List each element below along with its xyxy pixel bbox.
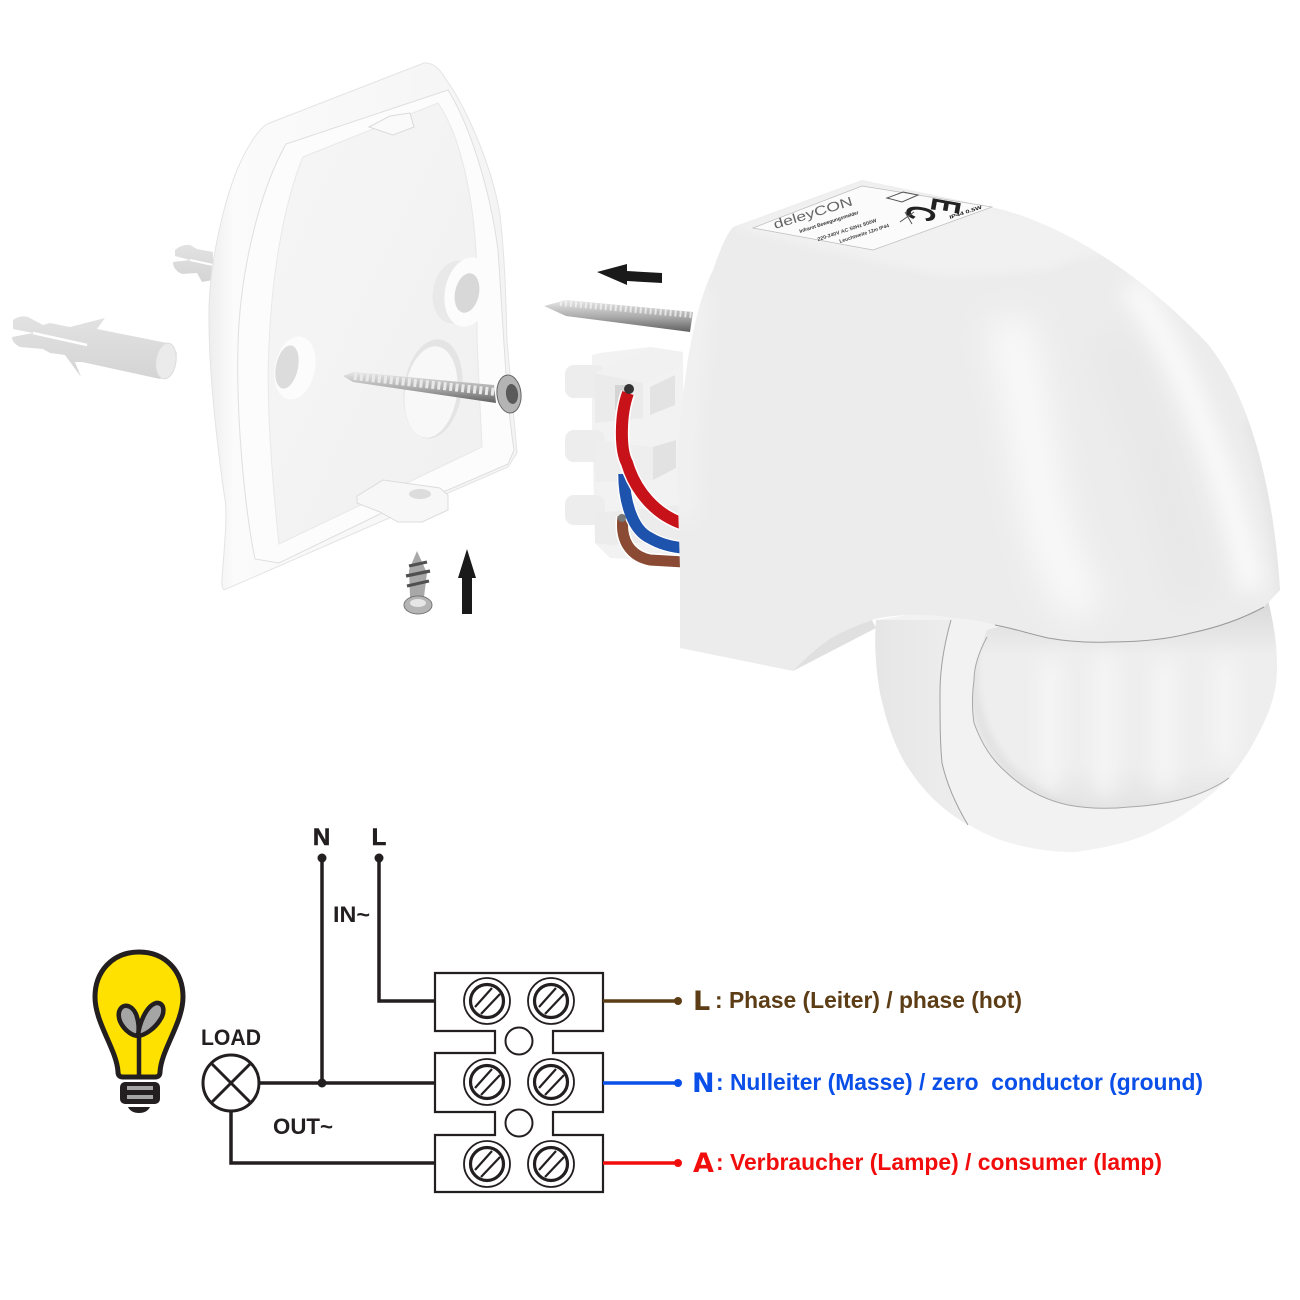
- legend: neutral: N: [692, 1068, 715, 1099]
- legend: neutral: [603, 1068, 1203, 1099]
- N label: N: [313, 824, 330, 851]
- wiring diagram: [95, 824, 1203, 1192]
- screw N right: [528, 1059, 574, 1105]
- L terminal dot: [374, 854, 384, 862]
- legend: phase: : Phase (Leiter) / phase (hot): [715, 987, 1022, 1013]
- terminal housing: [592, 347, 685, 562]
- legend: neutral: : Nulleiter (Masse) / zero conductor (ground): [716, 1069, 1203, 1095]
- blue wire: [624, 474, 684, 548]
- connector hole top: [506, 1028, 532, 1054]
- motion sensor dome: [875, 600, 1290, 852]
- LOAD label: LOAD: [201, 1025, 261, 1050]
- lower module front: [595, 505, 680, 545]
- IN label: IN~: [333, 902, 370, 927]
- cutout shadow: [793, 620, 876, 671]
- dome shell: [875, 600, 1277, 852]
- red wire end: [624, 384, 634, 394]
- lower edge line: [995, 607, 1264, 642]
- arrow: left: [597, 264, 662, 285]
- long mounting screw in plate: [343, 372, 523, 414]
- body shell: [678, 180, 1280, 671]
- plate floor: [268, 103, 482, 544]
- spec text line 2: 220-240V AC 50Hz 800W: [817, 218, 878, 243]
- upper module top: [595, 347, 683, 383]
- brown wire: [622, 517, 684, 562]
- legend: load: A: [693, 1148, 714, 1179]
- lens outline: [972, 637, 1229, 808]
- legend: load: : Verbraucher (Lampe) / consumer (lamp): [716, 1149, 1162, 1175]
- CE mark: E: E: [922, 195, 969, 216]
- connector hole bottom: [506, 1110, 532, 1136]
- legend: phase: [603, 986, 1022, 1017]
- rear wall plug behind plate: [173, 245, 213, 282]
- crossed bin mark: [900, 212, 914, 224]
- plate recess: [238, 90, 514, 563]
- screw L left: [464, 978, 510, 1024]
- sensor screw protruding: [544, 300, 693, 332]
- terminal strip: [435, 973, 603, 1192]
- upper screw post: [427, 253, 498, 331]
- terminal block on sensor: [565, 347, 685, 562]
- lamp symbol: [203, 1055, 259, 1111]
- cable knock-out: [397, 335, 469, 443]
- lower screw post: [269, 333, 321, 403]
- legend: load: [603, 1148, 1162, 1179]
- middle module front: [595, 440, 653, 482]
- L label: L: [372, 824, 386, 851]
- CE mark: C: C: [897, 202, 944, 225]
- label sticker: [753, 186, 992, 250]
- spec text line 3: Leuchtweite 12m IP44: [839, 223, 890, 245]
- plate outer rim: [209, 63, 517, 590]
- front wall plug: [12, 316, 178, 380]
- upper recess: [650, 375, 675, 415]
- lower lug: [565, 495, 605, 525]
- back plate: [209, 63, 517, 590]
- brand name: deleyCON: [771, 194, 854, 232]
- light bulb icon: [95, 952, 183, 1113]
- small mark: IP44 0.5W: [949, 205, 983, 221]
- N terminal dot: [318, 854, 326, 862]
- sensor body: [678, 180, 1285, 671]
- wires: [231, 858, 435, 1163]
- dome left segment: [875, 620, 968, 825]
- OUT label: OUT~: [273, 1114, 333, 1139]
- screw L right: [528, 978, 574, 1024]
- top clip: [369, 113, 414, 135]
- arrow: up: [458, 549, 476, 614]
- short tab screw: [404, 551, 432, 614]
- double-insulation box: [887, 192, 918, 202]
- bottom tab: [357, 480, 448, 522]
- screw A left: [464, 1141, 510, 1187]
- screw N left: [464, 1059, 510, 1105]
- brown wire end: [618, 514, 626, 522]
- middle recess: [653, 440, 676, 480]
- screw A right: [528, 1141, 574, 1187]
- middle lug: [565, 430, 605, 462]
- seam: [940, 620, 968, 825]
- legend: phase: L: [693, 986, 710, 1017]
- spec text line 1: Infrarot Bewegungsmelder: [799, 210, 860, 235]
- upper wire window: [615, 385, 627, 410]
- lens: [973, 602, 1276, 808]
- upper module front: [595, 373, 643, 423]
- junction dot: [318, 1078, 326, 1088]
- red wire: [622, 393, 684, 524]
- upper lug: [565, 365, 605, 398]
- body shading: [678, 289, 1257, 604]
